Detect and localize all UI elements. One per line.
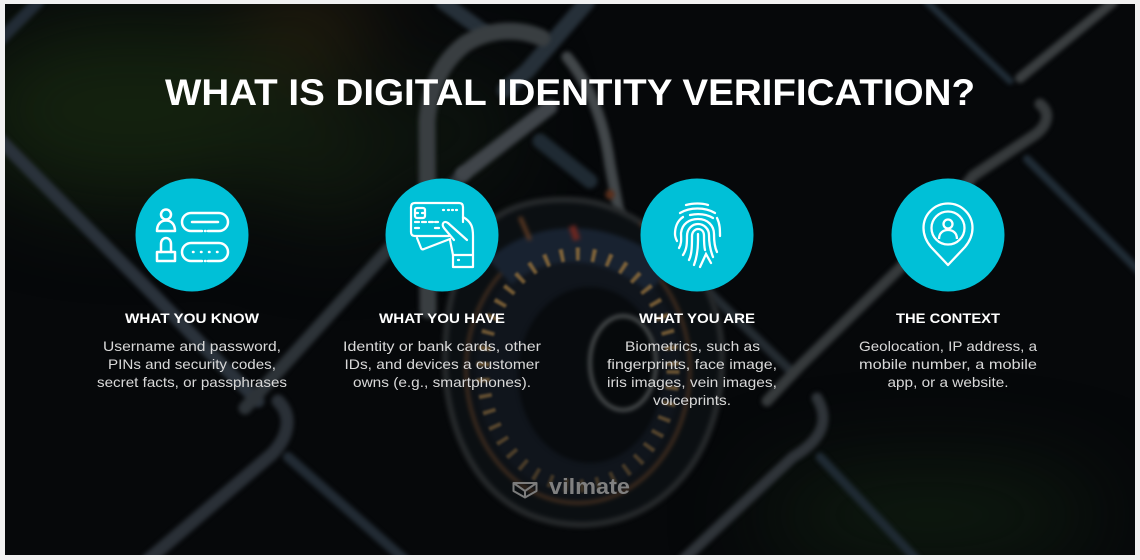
description <box>859 338 1037 390</box>
wordmark: vilmate <box>549 474 630 499</box>
description <box>343 338 541 390</box>
description: secret facts, or passphrases <box>97 374 287 390</box>
shackle <box>427 31 624 310</box>
heading: WHAT YOU HAVE <box>379 310 505 326</box>
icon: location pin with person <box>892 178 1004 292</box>
description: fingerprints, face image, <box>607 356 777 372</box>
description: Identity or bank cards, other <box>343 338 541 354</box>
description <box>607 338 777 408</box>
icon: user and password fields <box>136 178 248 292</box>
icon: hand holding cards <box>386 178 498 292</box>
logo: vilmate <box>512 478 630 498</box>
description: Username and password, <box>103 338 281 354</box>
description: PINs and security codes, <box>108 356 276 372</box>
panel: what you have <box>343 178 541 390</box>
panel: what you know <box>97 178 287 390</box>
heading: WHAT YOU ARE <box>639 310 755 326</box>
lock body <box>445 200 722 525</box>
description: voiceprints. <box>653 392 731 408</box>
panel: the context <box>859 178 1037 390</box>
heading: WHAT YOU KNOW <box>125 310 260 326</box>
title: WHAT IS DIGITAL IDENTITY VERIFICATION? <box>165 72 975 113</box>
description <box>97 338 287 390</box>
description: app, or a website. <box>888 374 1008 390</box>
dial ticks <box>483 254 673 486</box>
heading: THE CONTEXT <box>896 310 1000 326</box>
description: Biometrics, such as <box>625 338 760 354</box>
panel: what you are <box>607 178 777 408</box>
description: IDs, and devices a customer <box>344 356 540 372</box>
description: iris images, vein images, <box>607 374 777 390</box>
dial centre and ring <box>518 287 662 463</box>
description: owns (e.g., smartphones). <box>353 374 531 390</box>
description: Geolocation, IP address, a <box>859 338 1037 354</box>
icon: logo mark <box>514 483 536 498</box>
icon: fingerprint <box>640 178 754 292</box>
description: mobile number, a mobile <box>859 356 1037 372</box>
